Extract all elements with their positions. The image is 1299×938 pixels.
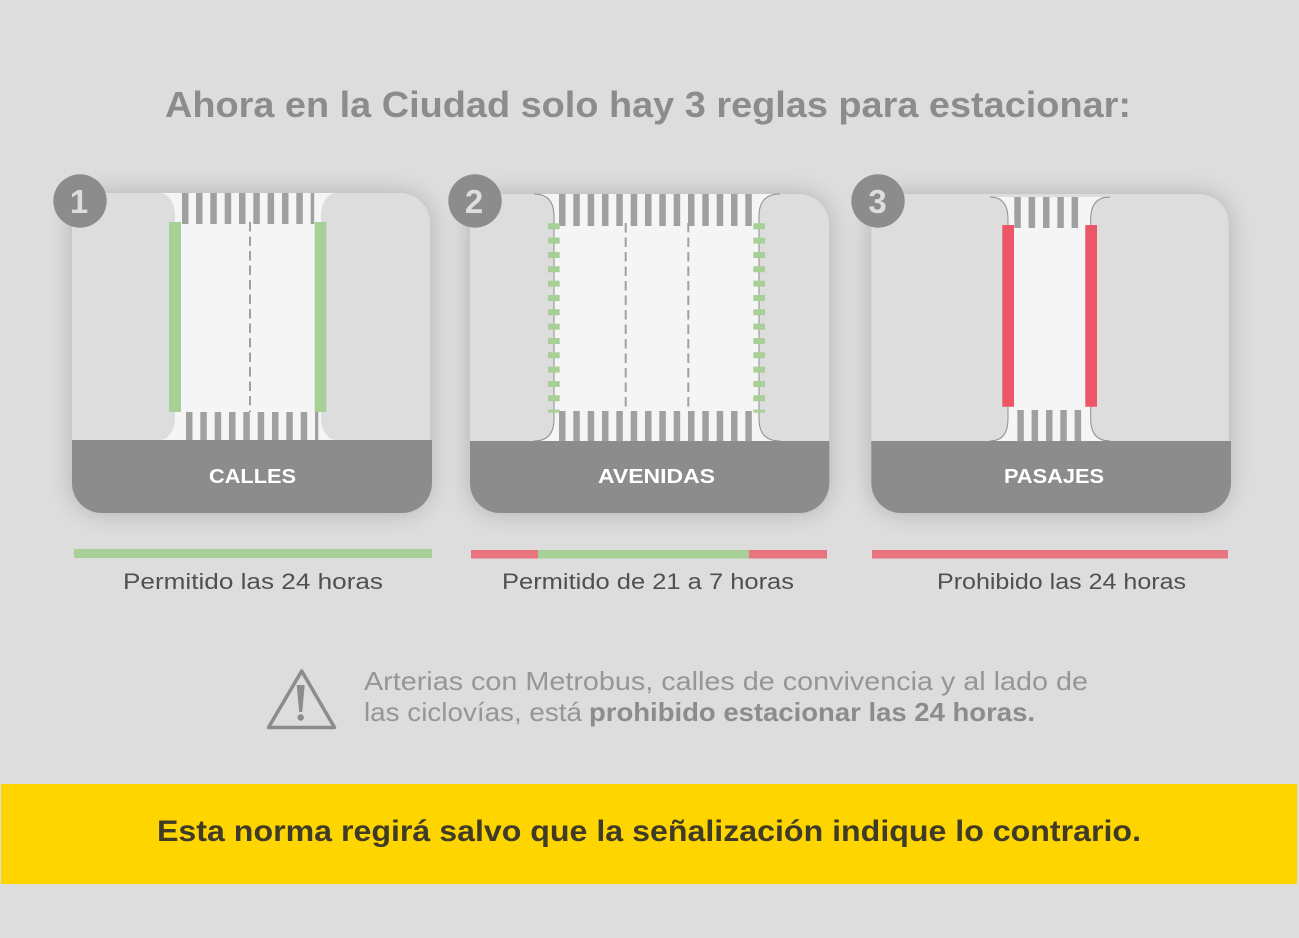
badge 1 <box>53 174 107 228</box>
label bar <box>470 441 829 513</box>
badge 1: 1 <box>70 183 88 220</box>
rule text: calles: Permitido las 24 horas <box>123 569 383 594</box>
banner text: Esta norma regirá salvo que la señalización indique lo contrario. <box>157 815 1141 848</box>
yellow banner <box>1 784 1297 884</box>
note text: prohibido estacionar las 24 horas. <box>589 697 1035 727</box>
lane dividers <box>626 223 688 411</box>
note text: las ciclovías, está <box>364 697 583 727</box>
green curb lines <box>169 222 326 412</box>
crosswalk stripes <box>182 193 318 440</box>
crosswalk stripes <box>1014 197 1081 441</box>
road surface <box>160 193 336 440</box>
lane divider <box>249 222 251 412</box>
rule bar: calles <box>74 549 432 558</box>
rule bar: pasajes <box>872 550 1228 558</box>
label: AVENIDAS <box>598 466 715 488</box>
badge 3 <box>851 174 905 228</box>
curb outlines <box>990 197 1110 441</box>
rule text: avenidas: Permitido de 21 a 7 horas <box>502 569 794 594</box>
curb outlines <box>534 194 780 441</box>
badge 2: 2 <box>465 183 483 220</box>
title: Ahora en la Ciudad solo hay 3 reglas para estacionar: <box>165 84 1131 125</box>
label bar <box>871 441 1231 513</box>
badge 2 <box>448 174 502 228</box>
crosswalk stripes <box>559 194 752 441</box>
note text: Arterias con Metrobus, calles de convivencia y al lado de <box>364 666 1088 696</box>
label: CALLES <box>209 466 296 488</box>
panel: avenidas <box>470 194 829 513</box>
rule bar: avenidas <box>471 550 827 558</box>
note text <box>364 666 1088 727</box>
road surface <box>990 197 1110 441</box>
icon: warning triangle <box>268 671 334 728</box>
green dashed curb lines <box>548 223 765 413</box>
road surface <box>534 194 780 441</box>
panel: pasajes <box>871 194 1231 513</box>
label: PASAJES <box>1004 466 1104 488</box>
rule text: pasajes: Prohibido las 24 horas <box>937 569 1186 594</box>
label bar <box>72 440 432 513</box>
red curb lines <box>1002 225 1097 407</box>
badge 3: 3 <box>868 183 887 220</box>
panel: calles <box>72 193 432 513</box>
